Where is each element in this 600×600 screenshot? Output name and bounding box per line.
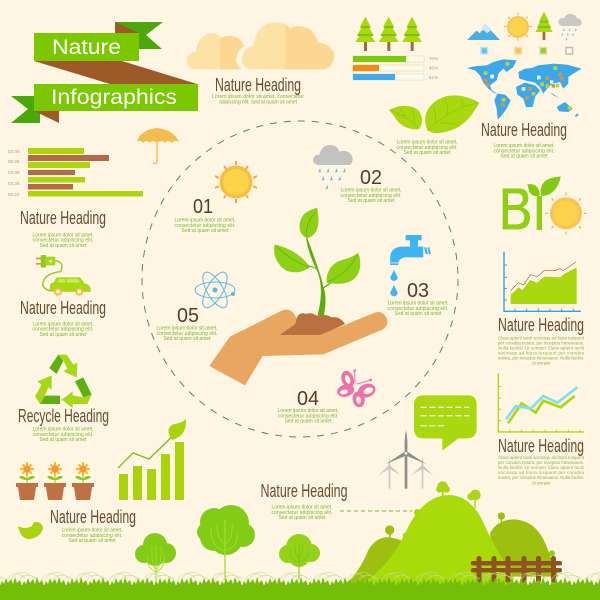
heading and paragraph: line chart: Class aptent taciti sociosqu ad litora torquent bbox=[498, 455, 585, 460]
step 01 sun bbox=[215, 161, 257, 203]
step 04 butterfly bbox=[336, 369, 377, 408]
heading: left nature 2: consectetur adipiscing elit. bbox=[32, 327, 94, 333]
Bio logo bbox=[503, 177, 587, 234]
step 04 text: 04 bbox=[297, 388, 319, 410]
top icons: mountain, sun, tree, cloud bbox=[467, 12, 582, 41]
heading and paragraph: line chart: Nulla facilisi. Ut semper Class aptent taciti bbox=[498, 465, 584, 470]
leaves text: Lorem ipsum dolor sit amet, bbox=[396, 140, 458, 146]
heading: map bbox=[481, 120, 567, 160]
fence bbox=[471, 556, 562, 583]
heading: bottom centre: Nature Heading bbox=[260, 481, 348, 501]
area chart bbox=[504, 252, 581, 311]
step 02 cloud and rain bbox=[313, 145, 353, 189]
step 05 text: 05 bbox=[177, 305, 199, 327]
title banner: Infographics bbox=[51, 86, 177, 109]
progress bars: 70% bbox=[429, 56, 438, 61]
step 05 text bbox=[156, 305, 218, 342]
grass bbox=[0, 566, 600, 600]
heading and paragraph: area chart: Nulla facilisi. Ut semper Class aptent taciti bbox=[498, 346, 584, 350]
heading and paragraph: area chart: Class aptent taciti sociosqu ad litora torquent bbox=[498, 336, 585, 340]
heading: left nature 1: Sed at quam sit amet bbox=[40, 243, 87, 249]
progress bars: 40% bbox=[429, 66, 438, 70]
step 03 text: Sed at quam sit amet bbox=[394, 311, 442, 317]
heading: top centre: Lorem ipsum dolor sit amet, consectetur bbox=[212, 94, 304, 100]
step 03 text bbox=[388, 280, 448, 317]
heading: left nature 2: Nature Heading bbox=[20, 298, 106, 318]
heading: map: Sed at quam sit amet bbox=[500, 154, 548, 160]
heading: top centre: Nature Heading bbox=[215, 75, 301, 95]
heading and paragraph: area chart: sociosqu ad litora torquent per conubia bbox=[498, 350, 585, 356]
tree big bbox=[197, 505, 255, 580]
step 05 atom bbox=[195, 269, 235, 311]
step 03 tap bbox=[390, 235, 431, 296]
heading: lower left bbox=[50, 507, 136, 544]
step 02 text: Sed at quam sit amet bbox=[348, 198, 395, 204]
heading: recycle bbox=[18, 406, 109, 443]
heading and paragraph: area chart: nostra, per inceptos himenaeos. Nulla facilisi. bbox=[498, 356, 584, 360]
heading and paragraph: line chart: sociosqu ad litora torquent per conubia bbox=[498, 470, 585, 475]
bar chart: growth with leaf bbox=[118, 419, 186, 500]
bar chart: time bars: 02:45 bbox=[8, 149, 20, 154]
leaves text: consectetur adipiscing elit. bbox=[396, 145, 458, 151]
heading: top centre bbox=[212, 75, 304, 106]
step 03 text: Lorem ipsum dolor sit amet, bbox=[388, 300, 448, 306]
step 02 text: 02 bbox=[360, 167, 382, 189]
hills bbox=[343, 481, 558, 587]
world map bbox=[467, 59, 582, 120]
heading and paragraph: line chart: per conubia nostra, per inceptos himenaeos. bbox=[498, 460, 584, 465]
heading: recycle: Sed at quam sit amet bbox=[40, 437, 87, 443]
tree small bbox=[279, 534, 320, 580]
step 01 text bbox=[174, 196, 236, 234]
step 02 text bbox=[340, 167, 402, 204]
heading: bottom centre: consectetur adipiscing elit. bbox=[272, 510, 332, 516]
step 04 text: Lorem ipsum dolor sit amet, bbox=[278, 408, 338, 414]
heading: lower left: Lorem ipsum dolor sit amet, bbox=[62, 528, 122, 534]
icon: electric car bbox=[36, 255, 91, 296]
icon: two leaves bbox=[389, 95, 479, 133]
icon: umbrella bbox=[137, 128, 179, 164]
step 01 text: Sed at quam sit amet bbox=[182, 228, 229, 234]
icon: wind turbines bbox=[378, 430, 433, 489]
heading: top centre: adipiscing elit. Sed at quam sit amet bbox=[219, 100, 298, 106]
heading: recycle: Lorem ipsum dolor sit amet, bbox=[32, 426, 94, 432]
step 04 text: Sed at quam sit amet bbox=[284, 419, 332, 425]
step 02 text: consectetur adipiscing elit. bbox=[340, 193, 402, 199]
heading: bottom centre: Lorem ipsum dolor sit amet, bbox=[272, 504, 332, 510]
heading: bottom centre: Sed at quam sit amet bbox=[278, 515, 326, 521]
heading and paragraph: line chart: nostra, per inceptos himenaeos. Nulla facilisi. bbox=[498, 475, 584, 480]
heading: left nature 2 bbox=[20, 298, 106, 338]
step 03 text: consectetur adipiscing elit. bbox=[388, 306, 448, 312]
leaves text bbox=[396, 140, 458, 156]
step 01 text: Lorem ipsum dolor sit amet, bbox=[174, 218, 236, 224]
hand holding soil bbox=[209, 310, 387, 385]
bar chart: time bars bbox=[8, 148, 143, 197]
heading and paragraph: area chart bbox=[498, 315, 585, 366]
bar chart: time bars: 63:26 bbox=[8, 181, 20, 186]
leaves text: Sed at quam sit amet bbox=[404, 150, 451, 156]
title banner: Nature bbox=[52, 36, 121, 59]
dashed circle bbox=[142, 121, 458, 437]
step 05 text: consectetur adipiscing elit. bbox=[156, 331, 218, 337]
plant bbox=[274, 208, 360, 315]
heading and paragraph: line chart: Ut semper bbox=[532, 480, 551, 486]
step 01 text: 01 bbox=[193, 196, 213, 218]
heading: left nature 1: Lorem ipsum dolor sit amet, bbox=[32, 232, 94, 238]
heading: bottom centre bbox=[260, 481, 348, 521]
heading and paragraph: line chart bbox=[498, 436, 585, 486]
step 05 text: Sed at quam sit amet bbox=[164, 336, 211, 342]
icon: bird bbox=[18, 522, 43, 539]
heading: map: consectetur adipiscing elit. bbox=[494, 148, 554, 154]
heading: left nature 1: consectetur adipiscing elit. bbox=[32, 238, 94, 244]
step 02 text: Lorem ipsum dolor sit amet, bbox=[340, 188, 402, 194]
line chart bbox=[498, 373, 584, 432]
icon: flower pots bbox=[16, 463, 94, 500]
legend squares bbox=[481, 48, 572, 54]
heading: lower left: Sed at quam sit amet bbox=[68, 538, 116, 544]
icon: three pine trees bbox=[355, 17, 422, 51]
title banner bbox=[11, 22, 198, 123]
heading: recycle: Recycle Heading bbox=[18, 406, 109, 426]
icon: recycle arrows bbox=[35, 355, 92, 408]
heading and paragraph: area chart: per conubia nostra, per inceptos himenaeos. bbox=[498, 340, 584, 346]
step 05 text: Lorem ipsum dolor sit amet, bbox=[156, 326, 218, 332]
bar chart: time bars: 09:25 bbox=[8, 159, 20, 164]
step 03 text: 03 bbox=[407, 280, 429, 302]
step 04 text bbox=[278, 388, 338, 425]
heading: recycle: consectetur adipiscing elit. bbox=[32, 432, 94, 438]
speech bubble bbox=[414, 395, 477, 451]
step 01 text: consectetur adipiscing elit. bbox=[174, 223, 236, 229]
heading: map: Lorem ipsum dolor sit amet, bbox=[494, 143, 554, 149]
icon: peach clouds bbox=[187, 22, 334, 69]
bar chart: time bars: 03:38 bbox=[8, 170, 20, 175]
heading: left nature 1: Nature Heading bbox=[20, 208, 106, 228]
heading: left nature 2: Sed at quam sit amet bbox=[40, 332, 87, 338]
heading: lower left: Nature Heading bbox=[50, 507, 136, 527]
heading: lower left: consectetur adipiscing elit. bbox=[62, 533, 122, 539]
step 04 text: consectetur adipiscing elit. bbox=[278, 413, 338, 419]
progress bars: 61% bbox=[429, 75, 438, 80]
progress bars bbox=[353, 56, 438, 80]
heading: left nature 2: Lorem ipsum dolor sit amet, bbox=[32, 321, 94, 327]
heading: left nature 1 bbox=[20, 208, 106, 249]
bar chart: time bars: 50:22 bbox=[8, 192, 20, 197]
tree left bbox=[135, 533, 176, 585]
heading and paragraph: area chart: Ut semper bbox=[532, 360, 551, 366]
